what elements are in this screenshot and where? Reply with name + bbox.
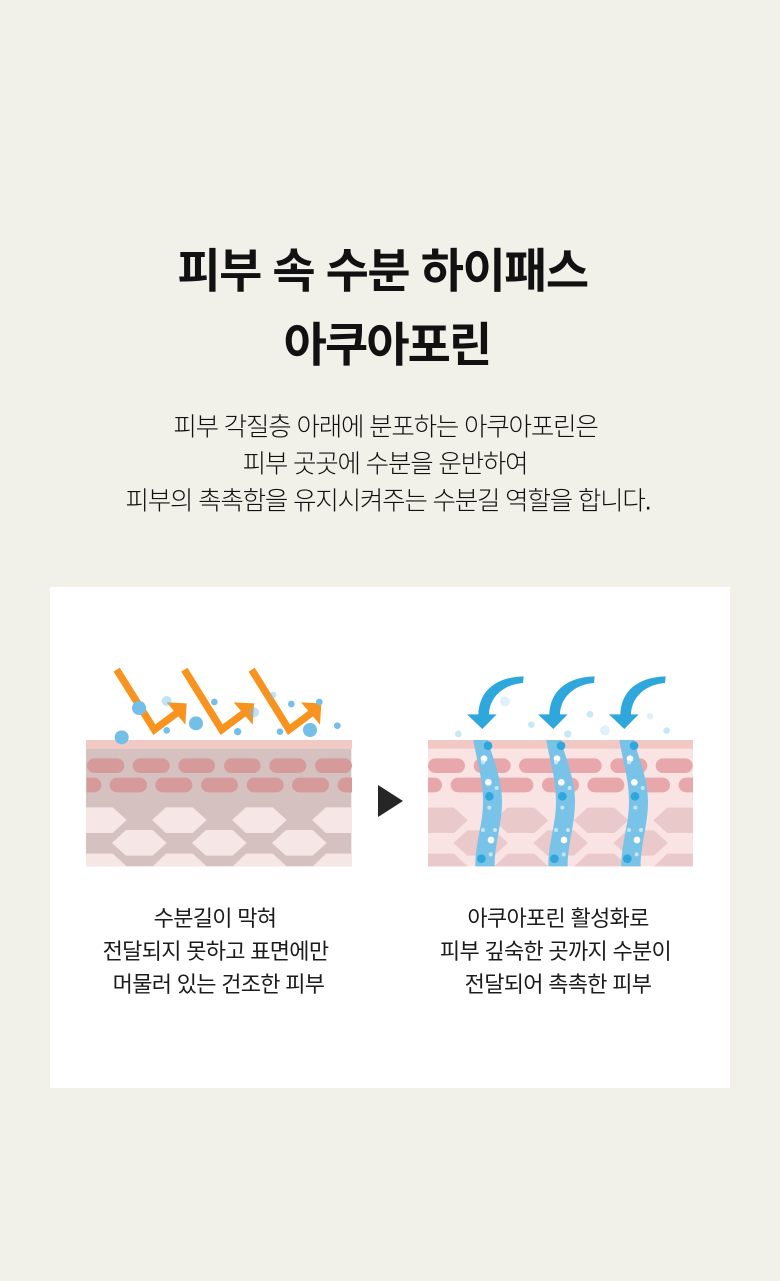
- illustration: hydrated skin: [428, 676, 693, 866]
- description text: 피부의 촉촉함을 유지시켜주는 수분길 역할을 합니다.: [125, 487, 651, 515]
- icon: blue curved arrows: [467, 676, 666, 729]
- caption: hydrated skin: [440, 906, 671, 997]
- caption: dry skin: 머물러 있는 건조한 피부: [113, 972, 324, 997]
- caption: dry skin: [103, 906, 328, 997]
- description text: [125, 413, 651, 515]
- caption: dry skin: 전달되지 못하고 표면에만: [103, 939, 328, 964]
- water droplets: [455, 696, 670, 738]
- description text: 피부 각질층 아래에 분포하는 아쿠아포린은: [173, 413, 598, 441]
- description text: 피부 곳곳에 수분을 운반하여: [243, 450, 527, 478]
- illustration: dry skin: [86, 668, 352, 866]
- title: [177, 244, 588, 372]
- icon: play arrow: [378, 785, 403, 817]
- title: 아쿠아포린: [284, 318, 490, 372]
- caption: hydrated skin: 전달되어 촉촉한 피부: [465, 972, 651, 997]
- water channels: [473, 740, 648, 866]
- icon: orange bounce arrows: [117, 670, 321, 730]
- water droplets: [115, 692, 341, 744]
- title: 피부 속 수분 하이패스: [177, 244, 588, 297]
- caption: hydrated skin: 아쿠아포린 활성화로: [467, 906, 649, 931]
- caption: hydrated skin: 피부 깊숙한 곳까지 수분이: [440, 939, 671, 964]
- panel: comparison: [50, 587, 730, 1088]
- caption: dry skin: 수분길이 막혀: [154, 906, 276, 931]
